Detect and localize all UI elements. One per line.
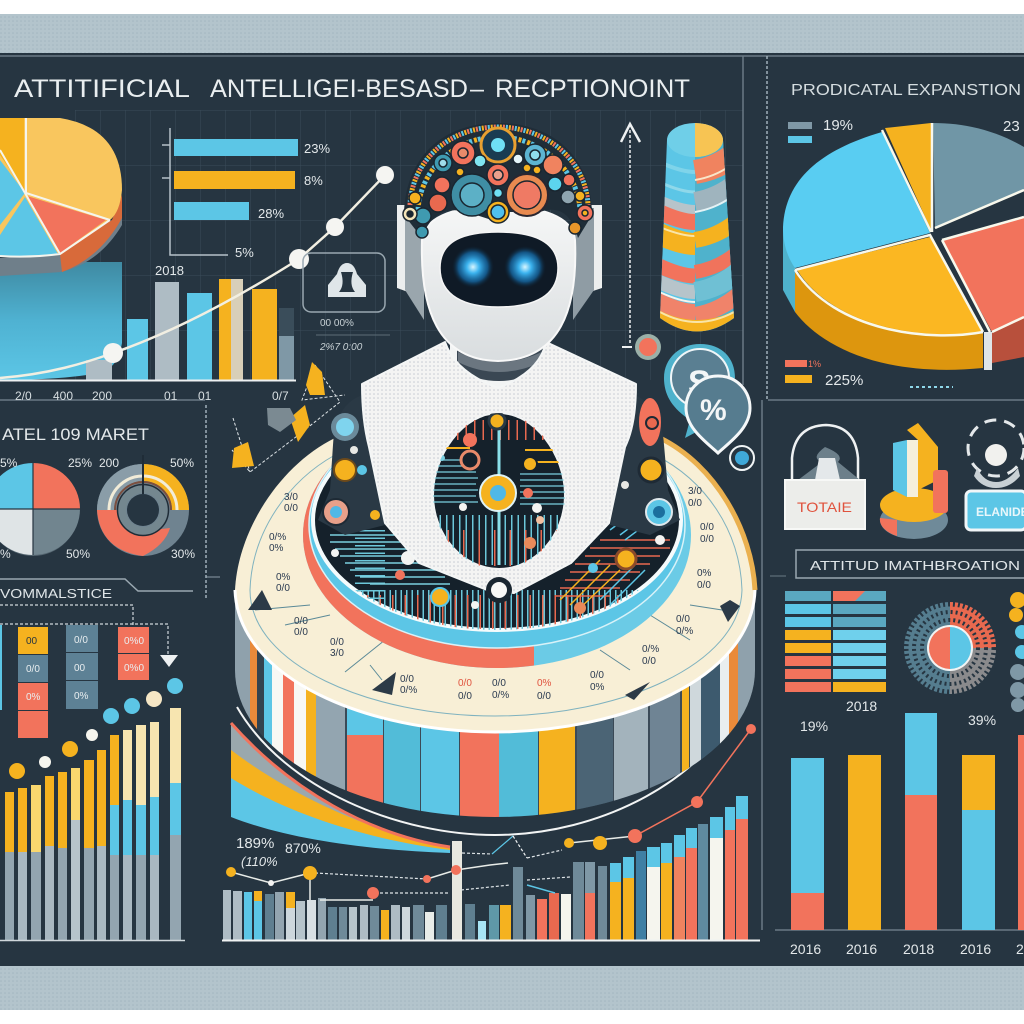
donut labels: % bbox=[0, 547, 11, 561]
bar chart: right bottom: 19% bbox=[800, 718, 828, 734]
label tiles: 00 bbox=[74, 663, 86, 674]
donut charts panel bbox=[0, 455, 195, 561]
right pie labels: 19% bbox=[823, 117, 853, 134]
icon: robot badge bbox=[966, 420, 1024, 530]
icon: total tag bbox=[785, 425, 865, 529]
axis labels under top left chart: 200 bbox=[92, 389, 112, 403]
ring chart bbox=[97, 455, 189, 556]
dial labels: 0/0 bbox=[697, 580, 711, 591]
dial labels: 0/% bbox=[269, 532, 286, 543]
dial segment lines bbox=[255, 605, 735, 680]
donut labels: 50% bbox=[170, 456, 194, 470]
chest circuit window bbox=[433, 413, 565, 603]
panel: top left cylinder pie bbox=[0, 118, 122, 380]
label tiles: 0%0 bbox=[124, 636, 144, 647]
dial labels: 0/0 bbox=[700, 534, 714, 545]
dot trail bbox=[9, 678, 183, 779]
bar labels: 28% bbox=[258, 206, 284, 221]
visor bbox=[440, 232, 558, 307]
bars bbox=[223, 796, 748, 940]
donut labels: 30% bbox=[171, 547, 195, 561]
label tiles: 0% bbox=[74, 691, 89, 702]
bar labels: 23% bbox=[304, 141, 330, 156]
panel: large right pie bbox=[783, 123, 1024, 370]
pie wedge cyan bbox=[783, 132, 930, 268]
dial labels: 0/0 bbox=[492, 678, 506, 689]
dial labels: 0/0 bbox=[400, 674, 414, 685]
year labels: 2 bbox=[1016, 941, 1024, 957]
cyan side bbox=[783, 227, 795, 312]
dial labels: 0/0 bbox=[688, 498, 702, 509]
icon: total tag: TOTAIE bbox=[797, 499, 852, 515]
right pie labels: 23 bbox=[1003, 118, 1020, 135]
dial labels: 0/% bbox=[400, 685, 417, 696]
icon: 3D block stack bbox=[880, 423, 948, 539]
title: ATTITIFICIAL bbox=[14, 75, 190, 103]
robot bbox=[318, 123, 680, 603]
eyes bbox=[452, 246, 494, 288]
circuit well bbox=[330, 500, 670, 614]
icon: lock badge: 00 00% bbox=[320, 318, 354, 329]
dial labels: 0/% bbox=[492, 690, 509, 701]
axis labels under top left chart: 400 bbox=[53, 389, 73, 403]
dial labels: 0/0 bbox=[294, 616, 308, 627]
dial labels: 0% bbox=[537, 678, 552, 689]
icon: lock badge: 2%7 0:00 bbox=[319, 342, 363, 353]
axis labels under top left chart: 0/7 bbox=[272, 389, 289, 403]
title: RECPTIONOINT bbox=[495, 75, 690, 103]
cream dial bbox=[235, 438, 755, 732]
bar 3 bbox=[174, 202, 249, 220]
dial labels: 0/0 bbox=[676, 614, 690, 625]
dial labels bbox=[269, 486, 714, 702]
year labels: 2018 bbox=[903, 941, 934, 957]
striped wall bbox=[235, 600, 755, 830]
donut labels: 200 bbox=[99, 456, 119, 470]
year labels: 2016 bbox=[960, 941, 991, 957]
network icon bbox=[232, 362, 345, 472]
donut labels: 5% bbox=[0, 456, 18, 470]
label tiles: 0% bbox=[26, 692, 41, 703]
dial labels: 0% bbox=[276, 572, 291, 583]
icon: speech bubbles with percent: S bbox=[688, 364, 711, 402]
bar labels bbox=[235, 141, 330, 260]
dial labels: 0/0 bbox=[458, 678, 472, 689]
outer arc bbox=[237, 690, 747, 835]
dial labels: 3/0 bbox=[688, 486, 702, 497]
dial inner outline bbox=[250, 455, 742, 716]
head ears bbox=[397, 205, 602, 320]
label tiles: 0/0 bbox=[26, 664, 40, 675]
subheading: analytics: VOMMALSTICE bbox=[0, 586, 112, 601]
subheading: attitude panel bbox=[770, 550, 1024, 578]
line chart: rising curve bbox=[0, 166, 394, 378]
panel: horizontal bars bbox=[162, 128, 330, 260]
dial labels: 0/% bbox=[642, 644, 659, 655]
dial labels: 0/0 bbox=[284, 503, 298, 514]
coral side bbox=[992, 318, 1024, 363]
bar 2 bbox=[174, 171, 295, 189]
icon: lock badge bbox=[303, 253, 390, 353]
upward arrow bbox=[621, 124, 640, 347]
pie chart bbox=[0, 463, 80, 556]
cylinder rim bbox=[0, 205, 122, 276]
dial labels: 0/0 bbox=[330, 637, 344, 648]
neck bbox=[450, 340, 548, 388]
bar chart: right bottom bbox=[790, 698, 1024, 957]
bar labels: 8% bbox=[304, 173, 323, 188]
right pie labels: 225% bbox=[825, 372, 863, 389]
bar chart: right bottom: 2018 bbox=[846, 698, 877, 714]
top band bbox=[0, 14, 1024, 54]
pie wedge grey bbox=[933, 123, 1024, 228]
central pedestal bbox=[235, 402, 755, 835]
chart labels: 189% bbox=[236, 835, 274, 852]
dial labels: 0/0 bbox=[294, 627, 308, 638]
label tiles: 0%0 bbox=[124, 663, 144, 674]
bar chart: top left bbox=[0, 263, 296, 380]
pie top bbox=[0, 118, 122, 256]
dial arrow markers bbox=[248, 590, 740, 700]
title: – bbox=[470, 75, 484, 103]
icon: speech bubbles with percent bbox=[664, 344, 754, 470]
orange side bbox=[795, 270, 983, 370]
dial labels: 0% bbox=[697, 568, 712, 579]
faint chart grid bbox=[75, 110, 743, 380]
bar chart: lower left rising bbox=[0, 678, 185, 940]
subheading: analytics bbox=[0, 579, 193, 601]
coral and cyan inner rings bbox=[303, 402, 691, 668]
dial labels: 0/0 bbox=[642, 656, 656, 667]
central lower chart: (110% bbox=[241, 854, 278, 869]
donut labels bbox=[0, 456, 195, 561]
bar chart: right bottom: 39% bbox=[968, 712, 996, 728]
axis labels under top left chart: 01 bbox=[198, 389, 212, 403]
title bbox=[14, 75, 690, 103]
dial labels: 0/0 bbox=[458, 691, 472, 702]
dial labels: 3/0 bbox=[284, 492, 298, 503]
bar 1 bbox=[174, 139, 298, 156]
pie wedge orange bottom bbox=[797, 237, 983, 334]
swoosh area bbox=[231, 723, 450, 853]
dot column bbox=[1009, 592, 1024, 712]
right panel heading: PRODICATAL EXPANSTION bbox=[791, 82, 1021, 99]
icon: coral node bbox=[635, 334, 661, 360]
bar labels: 5% bbox=[235, 245, 254, 260]
icon: speech bubbles with percent: % bbox=[700, 394, 727, 427]
right pie labels: 1% bbox=[808, 359, 821, 369]
dial labels: 0/0 bbox=[276, 583, 290, 594]
pie wedge orange top bbox=[885, 123, 931, 230]
shoulder right bbox=[610, 395, 680, 535]
label tiles bbox=[0, 605, 178, 738]
dial labels: 0/0 bbox=[537, 691, 551, 702]
bottom band bbox=[0, 965, 1024, 1010]
head shell bbox=[422, 205, 575, 361]
brain nodes bbox=[403, 123, 593, 238]
stacked cylinder tower bbox=[660, 123, 734, 332]
year labels: 2016 bbox=[846, 941, 877, 957]
label tiles: 00 bbox=[26, 636, 38, 647]
line overlay bbox=[222, 729, 760, 940]
dial rim highlights bbox=[660, 438, 755, 590]
shoulder left bbox=[318, 395, 385, 535]
dial labels: 0/0 bbox=[590, 670, 604, 681]
right pie labels bbox=[785, 117, 1020, 389]
axis labels under top left chart: 01 bbox=[164, 389, 178, 403]
donut labels: 50% bbox=[66, 547, 90, 561]
cylinder body bbox=[0, 262, 122, 380]
striped table chart bbox=[785, 591, 886, 692]
central lower chart bbox=[222, 723, 760, 940]
dial labels: 0/0 bbox=[700, 522, 714, 533]
bar chart: top left: 2018 bbox=[155, 263, 184, 278]
dial labels: 0% bbox=[269, 543, 284, 554]
pie wedge coral bbox=[942, 217, 1024, 332]
dial labels: 0% bbox=[590, 682, 605, 693]
radial dot chart bbox=[904, 602, 996, 694]
dial labels: 0/% bbox=[676, 626, 693, 637]
year labels: 2016 bbox=[790, 941, 821, 957]
title: ANTELLIGEI-BESASD bbox=[210, 75, 468, 103]
axis labels under top left chart: 2/0 bbox=[15, 389, 32, 403]
heading: market: ATEL 109 MARET bbox=[2, 425, 149, 444]
year labels bbox=[790, 941, 1024, 957]
central lower chart: 870% bbox=[285, 840, 321, 856]
torso bib bbox=[362, 342, 636, 593]
donut labels: 25% bbox=[68, 456, 92, 470]
dial labels: 3/0 bbox=[330, 648, 344, 659]
label tiles: 0/0 bbox=[74, 635, 88, 646]
subheading: attitude panel: ATTITUD IMATHBROATION bbox=[810, 558, 1020, 573]
axis labels under top left chart bbox=[15, 389, 289, 403]
